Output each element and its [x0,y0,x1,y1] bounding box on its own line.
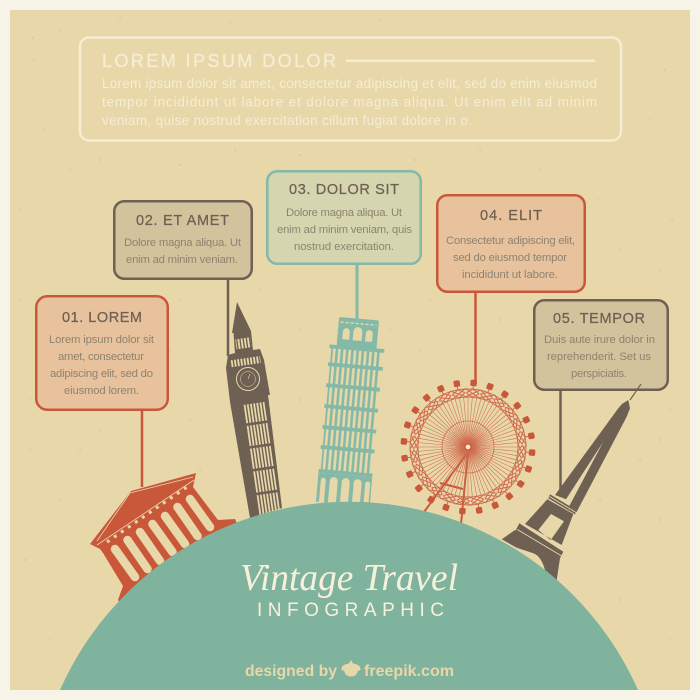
icon: freepik mascot [341,660,361,676]
box 05 body [544,334,655,380]
box 04 body: Consectetur adipiscing elit, [446,235,575,247]
globe hill [60,502,638,690]
box 05 body: Duis aute irure dolor in [544,334,655,346]
box 04 body: sed do eiusmod tempor [453,252,567,264]
box 05 heading: 05. TEMPOR [553,311,645,327]
landmark: temple [90,473,240,625]
landmark: ferris wheel [400,379,536,524]
wheel [400,379,536,515]
intro heading: LOREM IPSUM DOLOR [102,51,336,71]
box 01 body: amet, consectetur [58,351,144,363]
box 03 body: Dolore magna aliqua. Ut [286,207,403,219]
box 02 body [124,237,242,266]
box 01 heading: 01. LOREM [62,310,142,326]
box 03 [267,171,421,264]
intro heading rule [346,60,595,62]
box 01 body: Lorem ipsum dolor sit [49,334,155,346]
clock face [236,368,260,390]
subtitle: INFOGRAPHIC [257,600,444,621]
box 02 body: enim ad minim veniam. [126,254,238,266]
intro body text [102,76,597,128]
landmark: lattice tower [502,400,630,580]
intro body text: tempor incididunt ut labore et dolore magna aliqua. Ut enim elit ad minim [102,94,597,110]
landmark: clock tower [226,302,283,521]
credit line: designed by [245,663,337,680]
box 01 [36,296,168,410]
intro panel [80,38,621,140]
box 01 body: adipiscing elit, sed do [50,368,153,380]
box 03 heading: 03. DOLOR SIT [289,182,399,198]
box 01 body [49,334,155,397]
credit line: freepik.com [364,663,454,680]
box 05 [534,300,668,390]
intro body text: veniam, quise nostrud exercitation cillum fugiat dolore in o. [102,113,472,128]
box 03 body [277,207,412,253]
clock tower belfry slats [227,336,283,521]
box 02 heading: 02. ET AMET [136,213,229,229]
box 02 body: Dolore magna aliqua. Ut [124,237,242,249]
credit line [245,660,454,680]
intro body text: Lorem ipsum dolor sit amet, consectetur adipiscing et elit, sed do enim eiusmod [102,76,597,91]
title: script: Vintage Travel [240,557,458,599]
box 05 body: reprehenderit. Set us [547,351,651,363]
box 04 [437,195,585,292]
box 04 body: incididunt ut labore. [462,269,558,281]
box 03 body: nostrud exercitation. [294,241,394,253]
box 04 heading: 04. ELIT [480,208,542,224]
box 04 body [446,235,575,281]
box 02 [114,201,252,279]
box 01 body: eiusmod lorem. [64,385,139,397]
box 05 body: perspiciatis. [571,368,627,380]
box 03 body: enim ad minim veniam, quis [277,224,412,236]
spire antenna over box 05 [630,384,641,400]
landmark: leaning tower [316,316,387,506]
connector lines [142,264,560,492]
